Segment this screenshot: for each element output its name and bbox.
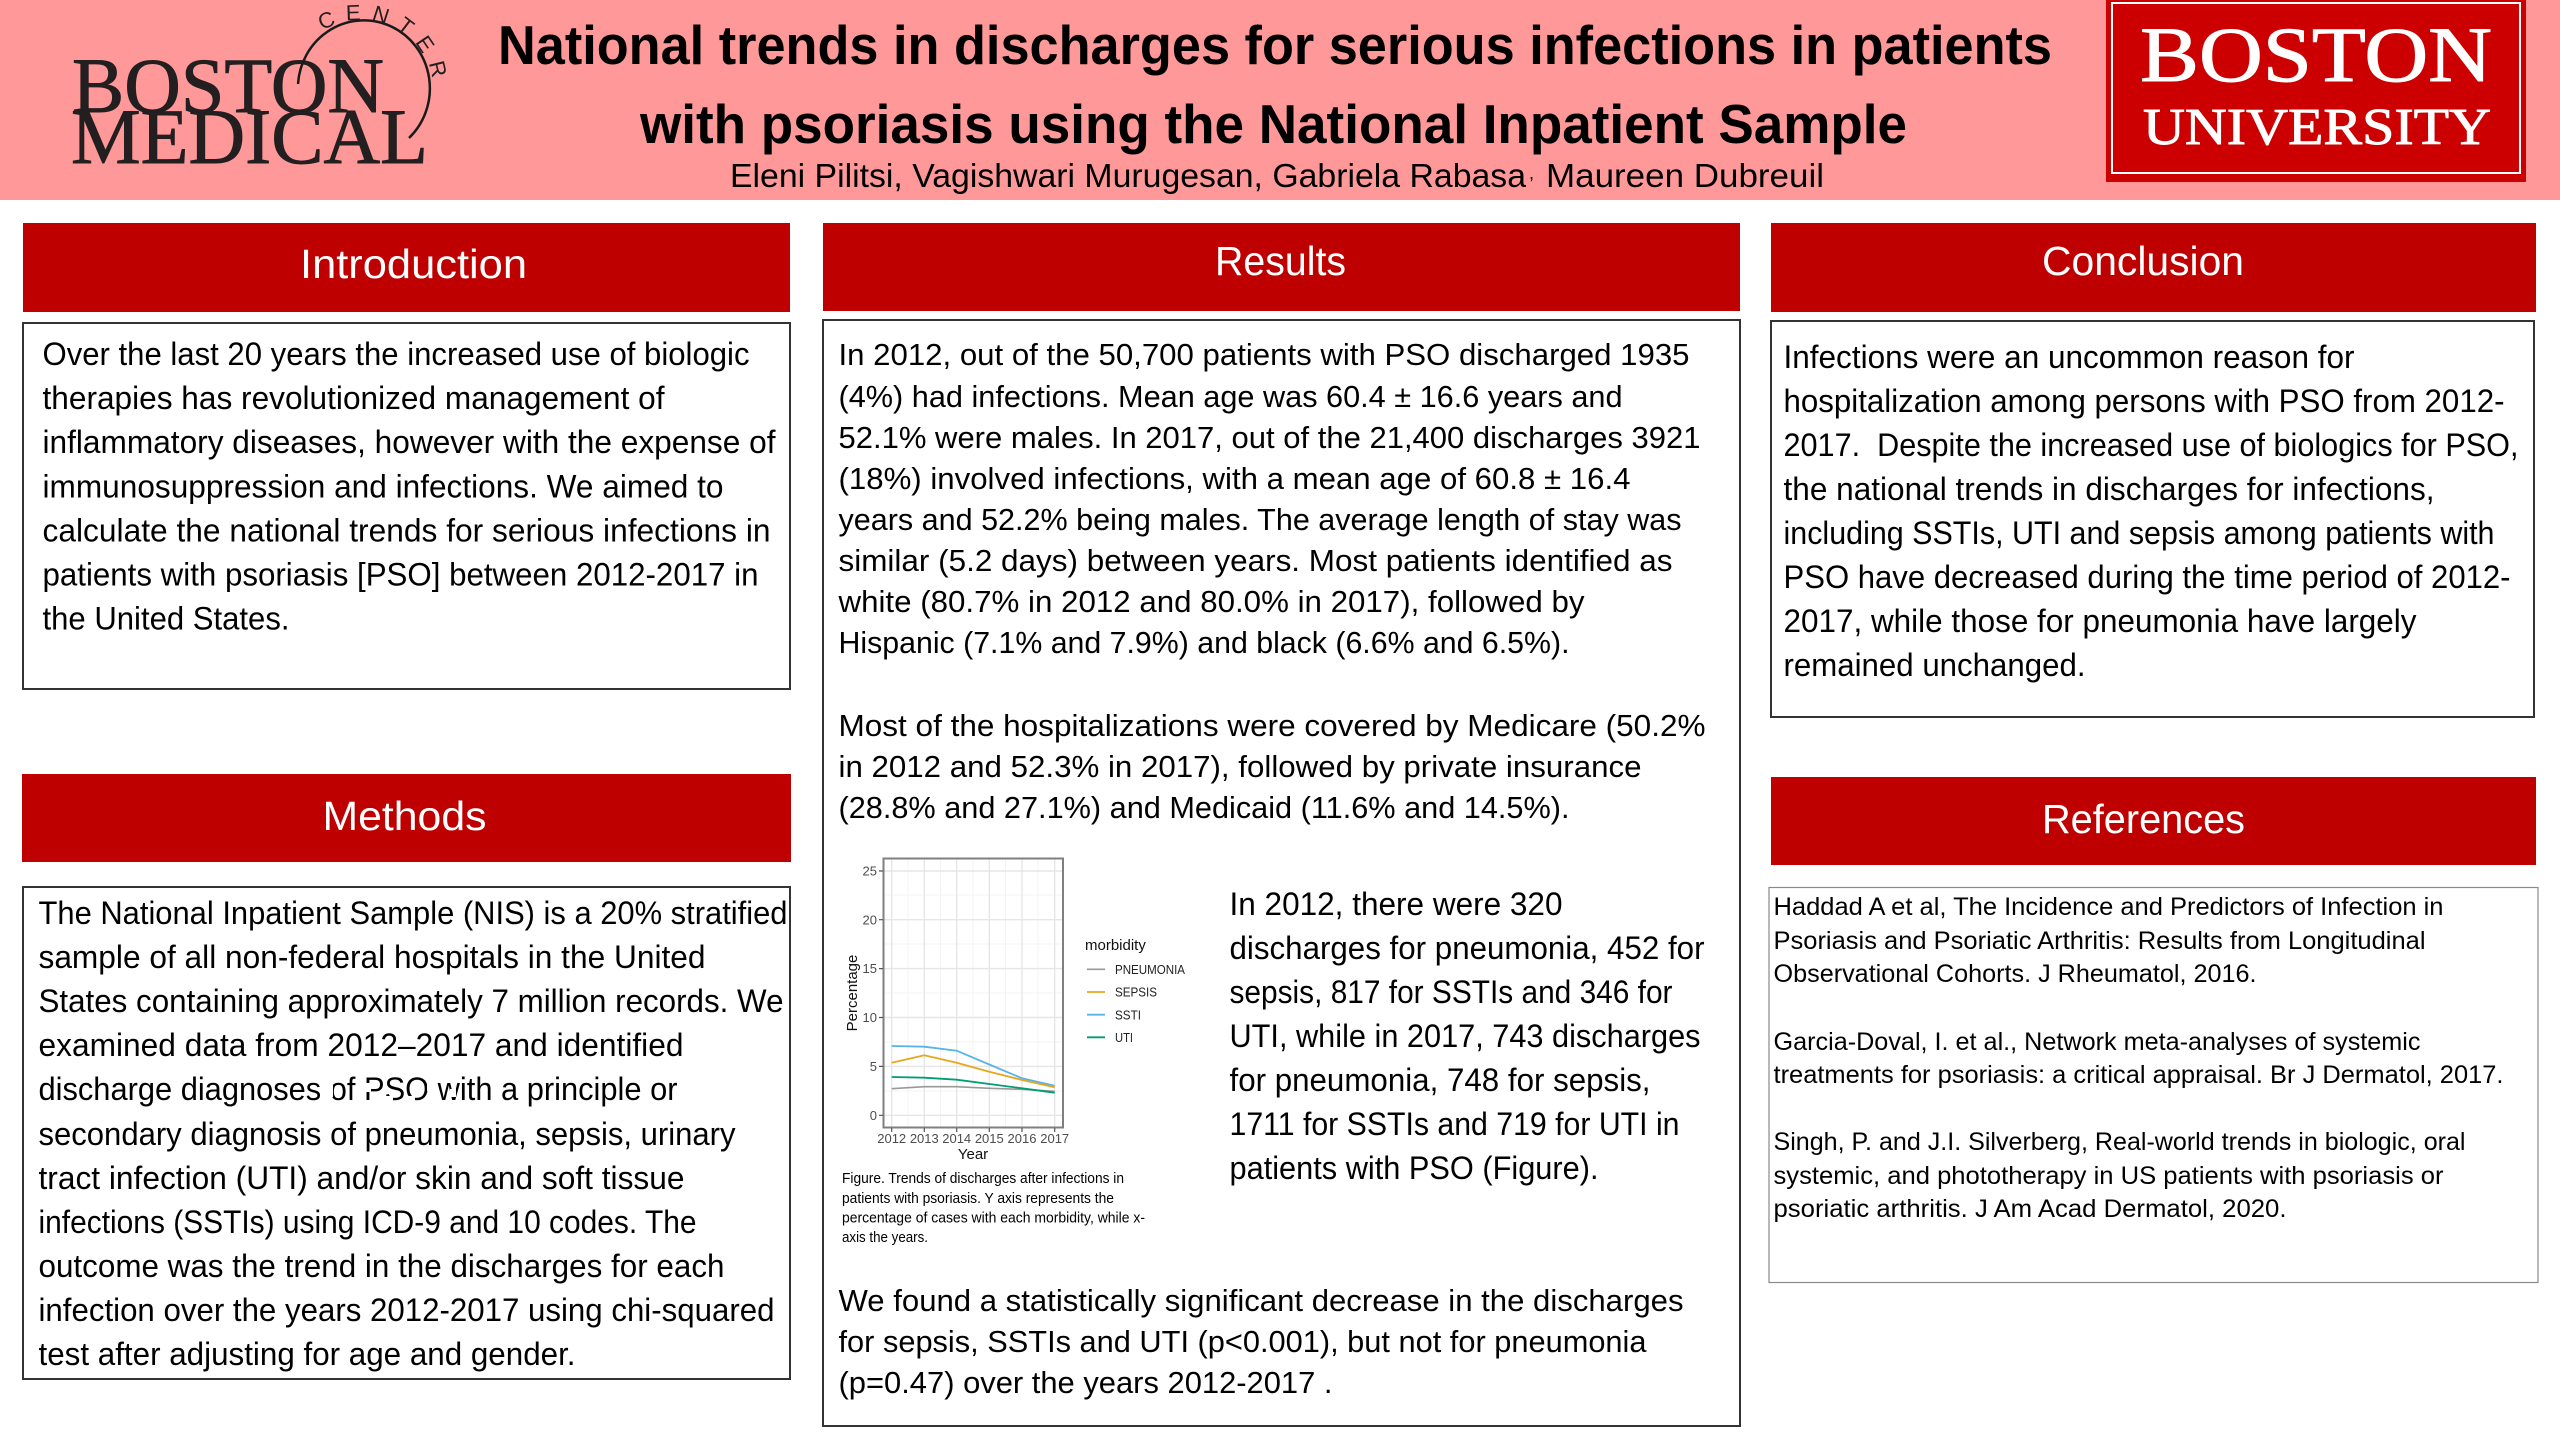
authors: Eleni Pilitsi, Vagishwari Murugesan, Gabriela Rabasa <box>730 158 1526 195</box>
heading: references: References <box>2042 796 2245 842</box>
series: sepsis <box>892 1055 1055 1087</box>
text block: introduction: calculate the national trends for serious infections in <box>42 512 770 548</box>
text block: demographics: years and 52.2% being males. The average length of stay was <box>838 502 1682 537</box>
panel: introduction <box>23 223 790 689</box>
logo: Boston Medical Center: MEDICAL <box>71 93 428 180</box>
legend: UTI <box>1115 1031 1133 1045</box>
figure caption: axis the years. <box>842 1230 928 1246</box>
x axis labels: Year <box>958 1146 988 1163</box>
x axis labels <box>877 1131 1069 1163</box>
heading: introduction: Introduction <box>300 241 527 287</box>
text block: conclusion: the national trends in discharges for infections, <box>1784 471 2434 507</box>
text block: introduction: therapies has revolutionized management of <box>42 380 665 416</box>
text block: conclusion: 2017. Despite the increased use of biologics for PSO, <box>1784 427 2518 463</box>
text block: conclusion: hospitalization among persons with PSO from 2012- <box>1784 383 2504 419</box>
text block: discharge counts: 1711 for SSTIs and 719 for UTI in <box>1230 1106 1680 1142</box>
text block: conclusion: Infections were an uncommon reason for <box>1784 339 2355 375</box>
text block: insurance: in 2012 and 52.3% in 2017), followed by private insurance <box>838 749 1642 784</box>
y axis labels: 25 <box>863 864 877 878</box>
text block: insurance: Most of the hospitalizations were covered by Medicare (50.2% <box>838 708 1706 743</box>
y axis labels <box>844 864 877 1123</box>
text block: insurance: (28.8% and 27.1%) and Medicaid (11.6% and 14.5%). <box>838 790 1570 825</box>
logo: Boston Medical Center: CENTER <box>319 4 446 78</box>
text block: discharge counts: for pneumonia, 748 for sepsis, <box>1230 1062 1650 1098</box>
y axis labels: 10 <box>863 1010 877 1025</box>
text block: demographics: In 2012, out of the 50,700 patients with PSO discharged 1935 <box>838 337 1690 372</box>
text block: discharge counts <box>1230 886 1705 1186</box>
text block: conclusion: remained unchanged. <box>1784 647 2086 683</box>
line chart: infection trends <box>844 858 1186 1163</box>
text block: references <box>1769 888 2538 1282</box>
text block: significance: for sepsis, SSTIs and UTI (p<0.001), but not for pneumonia <box>838 1324 1647 1359</box>
text block: methods: infection over the years 2012-2017 using chi-squared <box>38 1292 774 1328</box>
y axis labels: 0 <box>870 1108 877 1123</box>
series: pneumonia <box>892 1087 1055 1091</box>
text block: conclusion: 2017, while those for pneumonia have largely <box>1784 603 2417 639</box>
text block: methods: tract infection (UTI) and/or skin and soft tissue <box>38 1160 684 1196</box>
text block: methods: secondary diagnosis of pneumonia, sepsis, urinary <box>38 1116 736 1152</box>
text block: demographics: white (80.7% in 2012 and 80.0% in 2017), followed by <box>837 584 1585 619</box>
legend: morbidity <box>1085 937 1146 954</box>
text block: demographics <box>837 337 1700 660</box>
text block: references: Psoriasis and Psoriatic Arthritis: Results from Longitudinal <box>1774 927 2426 955</box>
logo: Boston University: UNIVERSITY <box>2143 99 2491 156</box>
text block: methods: The National Inpatient Sample (NIS) is a 20% stratified <box>38 895 788 931</box>
heading: conclusion <box>1771 223 2536 312</box>
logo: Boston University: BOSTON <box>2140 11 2492 98</box>
text block: demographics: 52.1% were males. In 2017, out of the 21,400 discharges 3921 <box>838 420 1700 455</box>
title <box>498 14 2052 155</box>
heading: references <box>1771 777 2536 865</box>
series: UTI <box>892 1077 1055 1093</box>
x axis labels: 2017 <box>1040 1131 1069 1146</box>
text block: introduction: patients with psoriasis [PSO] between 2012-2017 in <box>42 556 758 592</box>
heading: introduction <box>23 223 790 312</box>
logo: Boston Medical Center <box>71 4 446 180</box>
panel: methods <box>22 774 791 1379</box>
text block: significance: (p=0.47) over the years 2012-2017 . <box>838 1365 1332 1400</box>
logo: Boston Medical Center: BOSTON <box>72 42 384 129</box>
title: National trends in discharges for serious infections in patients <box>498 14 2052 76</box>
figure caption: percentage of cases with each morbidity, while x- <box>842 1210 1145 1226</box>
x axis labels: 2013 <box>910 1131 939 1146</box>
text block: references: Haddad A et al, The Incidence and Predictors of Infection in <box>1774 893 2444 921</box>
text block: references: Observational Cohorts. J Rheumatol, 2016. <box>1774 960 2256 988</box>
text block: discharge counts: discharges for pneumonia, 452 for <box>1230 930 1705 966</box>
text block: discharge counts: UTI, while in 2017, 743 discharges <box>1230 1018 1700 1054</box>
text block: methods <box>23 887 790 1379</box>
heading: methods: Methods <box>322 793 486 839</box>
y axis labels: 15 <box>863 961 877 976</box>
y axis labels: 20 <box>863 912 877 928</box>
legend: PNEUMONIA <box>1115 963 1186 977</box>
heading: results <box>823 223 1740 311</box>
logo: Boston University <box>2106 0 2526 182</box>
text block: methods: States containing approximately 7 million records. We <box>38 983 784 1019</box>
text block: discharge counts: sepsis, 817 for SSTIs and 346 for <box>1230 974 1673 1010</box>
text block: discharge counts: patients with PSO (Figure). <box>1230 1150 1598 1186</box>
x axis labels: 2016 <box>1008 1131 1036 1146</box>
panel: references <box>1769 777 2538 1282</box>
text block: demographics: similar (5.2 days) between years. Most patients identified as <box>838 543 1672 578</box>
text block: methods: infections (SSTIs) using ICD-9 and 10 codes. The <box>38 1204 696 1240</box>
text block: conclusion: including SSTIs, UTI and sepsis among patients with <box>1784 515 2494 551</box>
text block: methods: test after adjusting for age and gender. <box>38 1336 576 1372</box>
authors: , <box>1529 163 1534 183</box>
text block: demographics: (18%) involved infections, with a mean age of 60.8 ± 16.4 <box>838 461 1630 496</box>
y axis labels: Percentage <box>844 955 861 1031</box>
text block: methods: outcome was the trend in the discharges for each <box>38 1248 724 1284</box>
panel: results <box>823 223 1740 1426</box>
figure caption: Figure. Trends of discharges after infections in <box>842 1171 1124 1187</box>
figure caption <box>842 1171 1145 1246</box>
text block: references: treatments for psoriasis: a critical appraisal. Br J Dermatol, 2017. <box>1774 1061 2504 1089</box>
text block: conclusion: PSO have decreased during the time period of 2012- <box>1784 559 2510 595</box>
authors: Maureen Dubreuil <box>1546 158 1824 195</box>
text block: references: Singh, P. and J.I. Silverberg, Real-world trends in biologic, oral <box>1774 1128 2466 1156</box>
text block: references: Garcia-Doval, I. et al., Network meta-analyses of systemic <box>1774 1028 2420 1056</box>
series: SSTI <box>892 1046 1055 1086</box>
x axis labels: 2012 <box>877 1131 906 1146</box>
title: with psoriasis using the National Inpatient Sample <box>639 93 1907 155</box>
text block: conclusion <box>1771 321 2534 717</box>
x axis labels: 2014 <box>942 1131 971 1146</box>
text block: introduction: the United States. <box>42 600 290 636</box>
text block: demographics: Hispanic (7.1% and 7.9%) and black (6.6% and 6.5%). <box>838 625 1570 660</box>
legend <box>1085 937 1186 1045</box>
text block: methods: discharge diagnoses of PSO with a principle or <box>38 1071 678 1107</box>
y axis labels: 5 <box>870 1059 877 1074</box>
text block: introduction: Over the last 20 years the increased use of biologic <box>42 336 750 372</box>
legend: SEPSIS <box>1115 986 1157 1000</box>
x axis labels: 2015 <box>975 1131 1004 1146</box>
legend: SSTI <box>1115 1008 1141 1022</box>
header banner <box>0 0 2560 200</box>
text block: methods: sample of all non-federal hospitals in the United <box>38 939 706 975</box>
text block: introduction: immunosuppression and infections. We aimed to <box>42 468 724 504</box>
heading: results: Results <box>1215 238 1346 284</box>
text block: references: psoriatic arthritis. J Am Acad Dermatol, 2020. <box>1774 1195 2286 1223</box>
text block: references: systemic, and phototherapy in US patients with psoriasis or <box>1774 1162 2444 1190</box>
text block: significance <box>838 1283 1684 1400</box>
text block: introduction: inflammatory diseases, however with the expense of <box>42 424 776 460</box>
text block: insurance <box>838 708 1706 825</box>
text block: methods: examined data from 2012–2017 and identified <box>38 1027 684 1063</box>
text block: discharge counts: In 2012, there were 320 <box>1230 886 1562 922</box>
panel: conclusion <box>1771 223 2536 717</box>
heading: conclusion: Conclusion <box>2042 238 2244 284</box>
heading: methods <box>22 774 791 862</box>
figure caption: patients with psoriasis. Y axis represents the <box>842 1191 1114 1207</box>
text block: demographics: (4%) had infections. Mean age was 60.4 ± 16.6 years and <box>838 379 1622 414</box>
text block: introduction <box>23 323 790 689</box>
text block: significance: We found a statistically significant decrease in the discharges <box>838 1283 1684 1318</box>
